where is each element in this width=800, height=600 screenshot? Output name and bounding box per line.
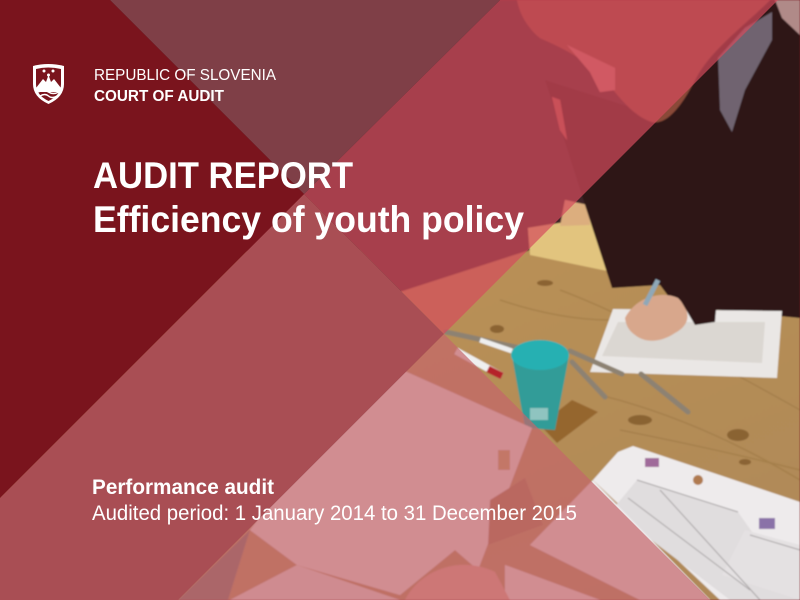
title bbox=[93, 155, 524, 240]
sparkly scarf bbox=[718, 12, 772, 132]
audit type and period: Audited period: 1 January 2014 to 31 December 2015 bbox=[92, 502, 577, 525]
organisation name: COURT OF AUDIT bbox=[94, 88, 224, 105]
dark background and standing person jacket bbox=[0, 0, 800, 292]
coloured logos on forms bbox=[645, 458, 659, 467]
skin at bottom bbox=[405, 565, 510, 600]
wood knots bbox=[490, 280, 751, 465]
panel: dark maroon field bbox=[0, 0, 304, 498]
pens on table bbox=[446, 332, 688, 412]
panel: grey-brown top triangle bbox=[110, 0, 500, 194]
colour swatch on pale form bbox=[498, 450, 510, 470]
panel: translucent crimson band over the photo bbox=[304, 0, 778, 334]
pen in hand bbox=[645, 280, 658, 305]
panel: muted rose field bbox=[0, 194, 444, 600]
title: AUDIT REPORT bbox=[93, 155, 353, 196]
audit type and period: Performance audit bbox=[92, 476, 274, 499]
organisation name: REPUBLIC OF SLOVENIA bbox=[94, 67, 276, 84]
title: Efficiency of youth policy bbox=[93, 199, 524, 240]
marker bbox=[456, 351, 502, 376]
organisation name bbox=[94, 67, 276, 105]
dark item bottom left bbox=[178, 530, 250, 600]
table bbox=[0, 250, 800, 600]
panel: pale pink overlay bottom right bbox=[178, 334, 710, 600]
face bbox=[567, 45, 615, 92]
paper on table bbox=[590, 309, 782, 378]
forms stack bottom right bbox=[593, 446, 800, 600]
floor behind the table bbox=[528, 218, 612, 272]
coat cuff bbox=[678, 296, 717, 325]
paper under pale overlay bbox=[250, 360, 532, 595]
forms continuing under pale overlay bbox=[530, 480, 710, 600]
shirt sliver bbox=[552, 97, 567, 140]
dark coat bbox=[545, 0, 800, 325]
writing hand bbox=[625, 295, 687, 341]
form table lines bbox=[612, 480, 800, 600]
pink scarf top right bbox=[775, 0, 800, 35]
stack of cards bbox=[488, 478, 543, 545]
form grid bbox=[602, 322, 765, 363]
cup bbox=[512, 356, 569, 430]
hair bbox=[517, 0, 770, 122]
coaster bbox=[540, 400, 598, 443]
wood grain bbox=[500, 290, 800, 480]
icon: Slovenian coat of arms bbox=[33, 64, 64, 104]
audit type and period bbox=[92, 476, 577, 525]
